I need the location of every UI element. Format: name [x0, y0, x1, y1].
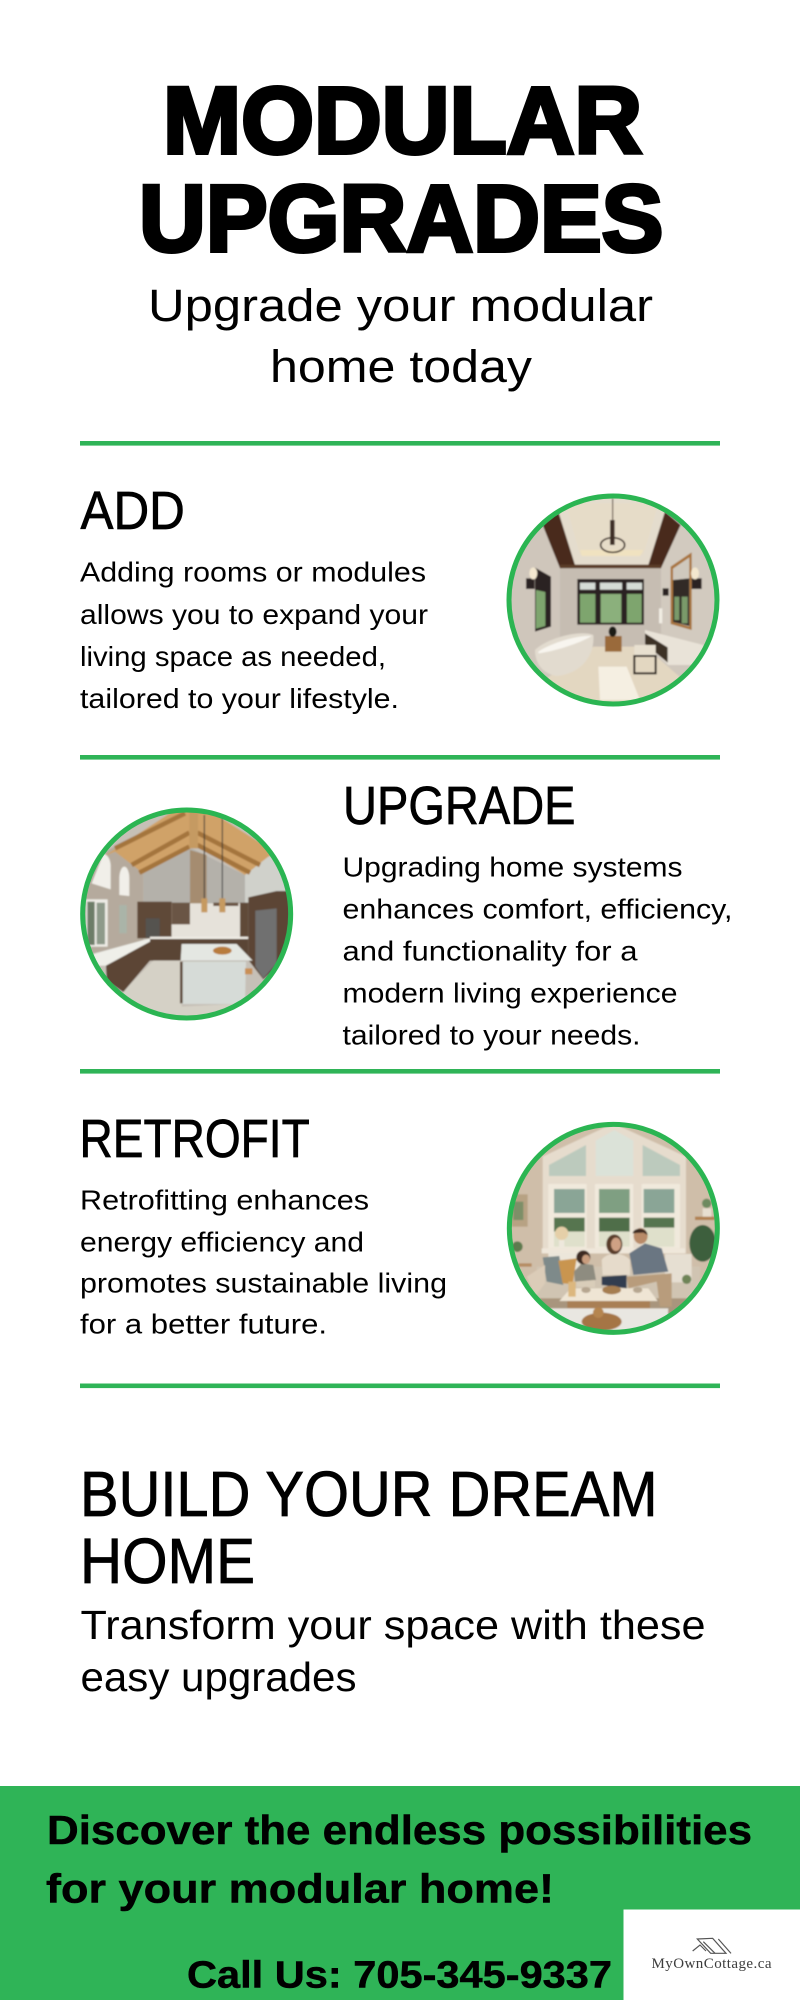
logo: MyOwnCottage.ca: MyOwnCottage.ca	[652, 1956, 772, 1972]
text block: upgrade: enhances comfort, efficiency,	[342, 894, 732, 925]
callout: discover the possibilities	[46, 1807, 752, 1912]
heading: upgrade: UPGRADE	[343, 775, 576, 836]
subtitle	[148, 280, 653, 392]
photo: family living room	[500, 1117, 727, 1340]
text block: add	[80, 557, 428, 714]
text block: add: tailored to your lifestyle.	[80, 683, 399, 714]
subtitle: Upgrade your modular	[148, 280, 653, 331]
heading: build your dream home: BUILD YOUR DREAM	[80, 1458, 658, 1530]
photo: bathroom	[506, 494, 720, 706]
panel: footer call to action	[0, 1786, 800, 2000]
heading: build your dream home: HOME	[80, 1526, 255, 1597]
text block: upgrade: and functionality for a	[342, 936, 638, 967]
icon: roof	[693, 1938, 731, 1953]
panel: upgrade	[73, 775, 733, 1051]
heading: retrofit: RETROFIT	[80, 1109, 310, 1169]
text block: upgrade: Upgrading home systems	[342, 852, 682, 883]
text block: transform your space	[80, 1602, 706, 1700]
heading: add: ADD	[80, 480, 185, 540]
title: MODULAR	[163, 68, 642, 174]
text block: upgrade: tailored to your needs.	[342, 1020, 640, 1051]
text block: upgrade: modern living experience	[342, 978, 678, 1009]
callout: discover the possibilities: for your modular home!	[46, 1866, 554, 1912]
callout: discover the possibilities: Discover the endless possibilities	[47, 1807, 752, 1853]
text block: retrofit: promotes sustainable living	[80, 1267, 447, 1298]
text block: transform your space: Transform your space with these	[80, 1602, 706, 1648]
title	[139, 68, 663, 271]
text block: retrofit	[80, 1184, 447, 1339]
heading: build your dream home	[80, 1458, 658, 1597]
text block: transform your space: easy upgrades	[80, 1654, 356, 1700]
photo: kitchen	[80, 808, 294, 1020]
phone number: Call Us: 705-345-9337	[187, 1954, 612, 1996]
text block: add: allows you to expand your	[80, 599, 428, 630]
text block: retrofit: for a better future.	[80, 1308, 327, 1339]
text block: upgrade	[342, 852, 732, 1051]
text block: add: Adding rooms or modules	[80, 557, 426, 588]
panel: add	[80, 480, 727, 714]
text block: add: living space as needed,	[80, 641, 386, 672]
panel: retrofit	[80, 1109, 727, 1340]
title: UPGRADES	[139, 165, 663, 271]
subtitle: home today	[270, 341, 533, 392]
logo: MyOwnCottage.ca	[624, 1910, 800, 2000]
text block: retrofit: energy efficiency and	[80, 1226, 364, 1257]
text block: retrofit: Retrofitting enhances	[80, 1184, 369, 1215]
